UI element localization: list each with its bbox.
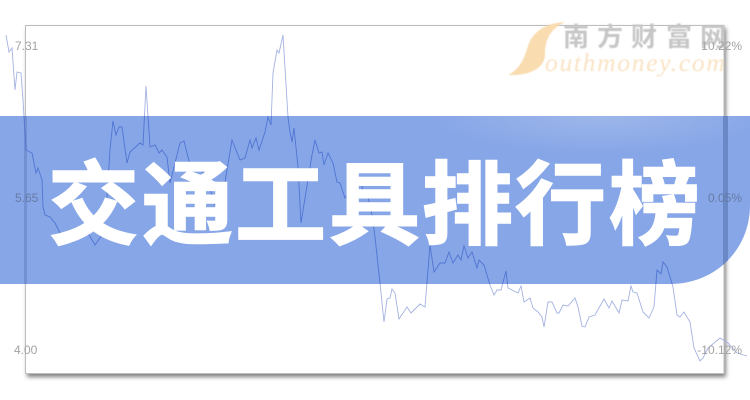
- axis mid price: 5.65: [15, 191, 39, 205]
- title: 交通工具排行榜: [48, 132, 700, 264]
- right axis labels: [697, 39, 742, 357]
- watermark: southmoney logo: [508, 17, 726, 77]
- left axis labels: [14, 39, 39, 357]
- axis mid percent: 0.05%: [708, 191, 742, 205]
- watermark url: outhmoney.com: [545, 48, 726, 77]
- panel edge visible through band, right: [723, 116, 728, 265]
- axis max price: 7.31: [15, 39, 39, 53]
- axis min price: 4.00: [14, 343, 38, 357]
- title band: [0, 116, 750, 284]
- band highlight: [380, 116, 750, 166]
- panel edge visible through band, left: [24, 116, 27, 284]
- price line chart, section over band: [24, 116, 672, 284]
- watermark swoosh: [508, 22, 565, 75]
- axis min percent: -10.12%: [697, 343, 742, 357]
- axis max percent: 10.22%: [701, 39, 742, 53]
- watermark chinese name: 南方财富网: [563, 17, 726, 54]
